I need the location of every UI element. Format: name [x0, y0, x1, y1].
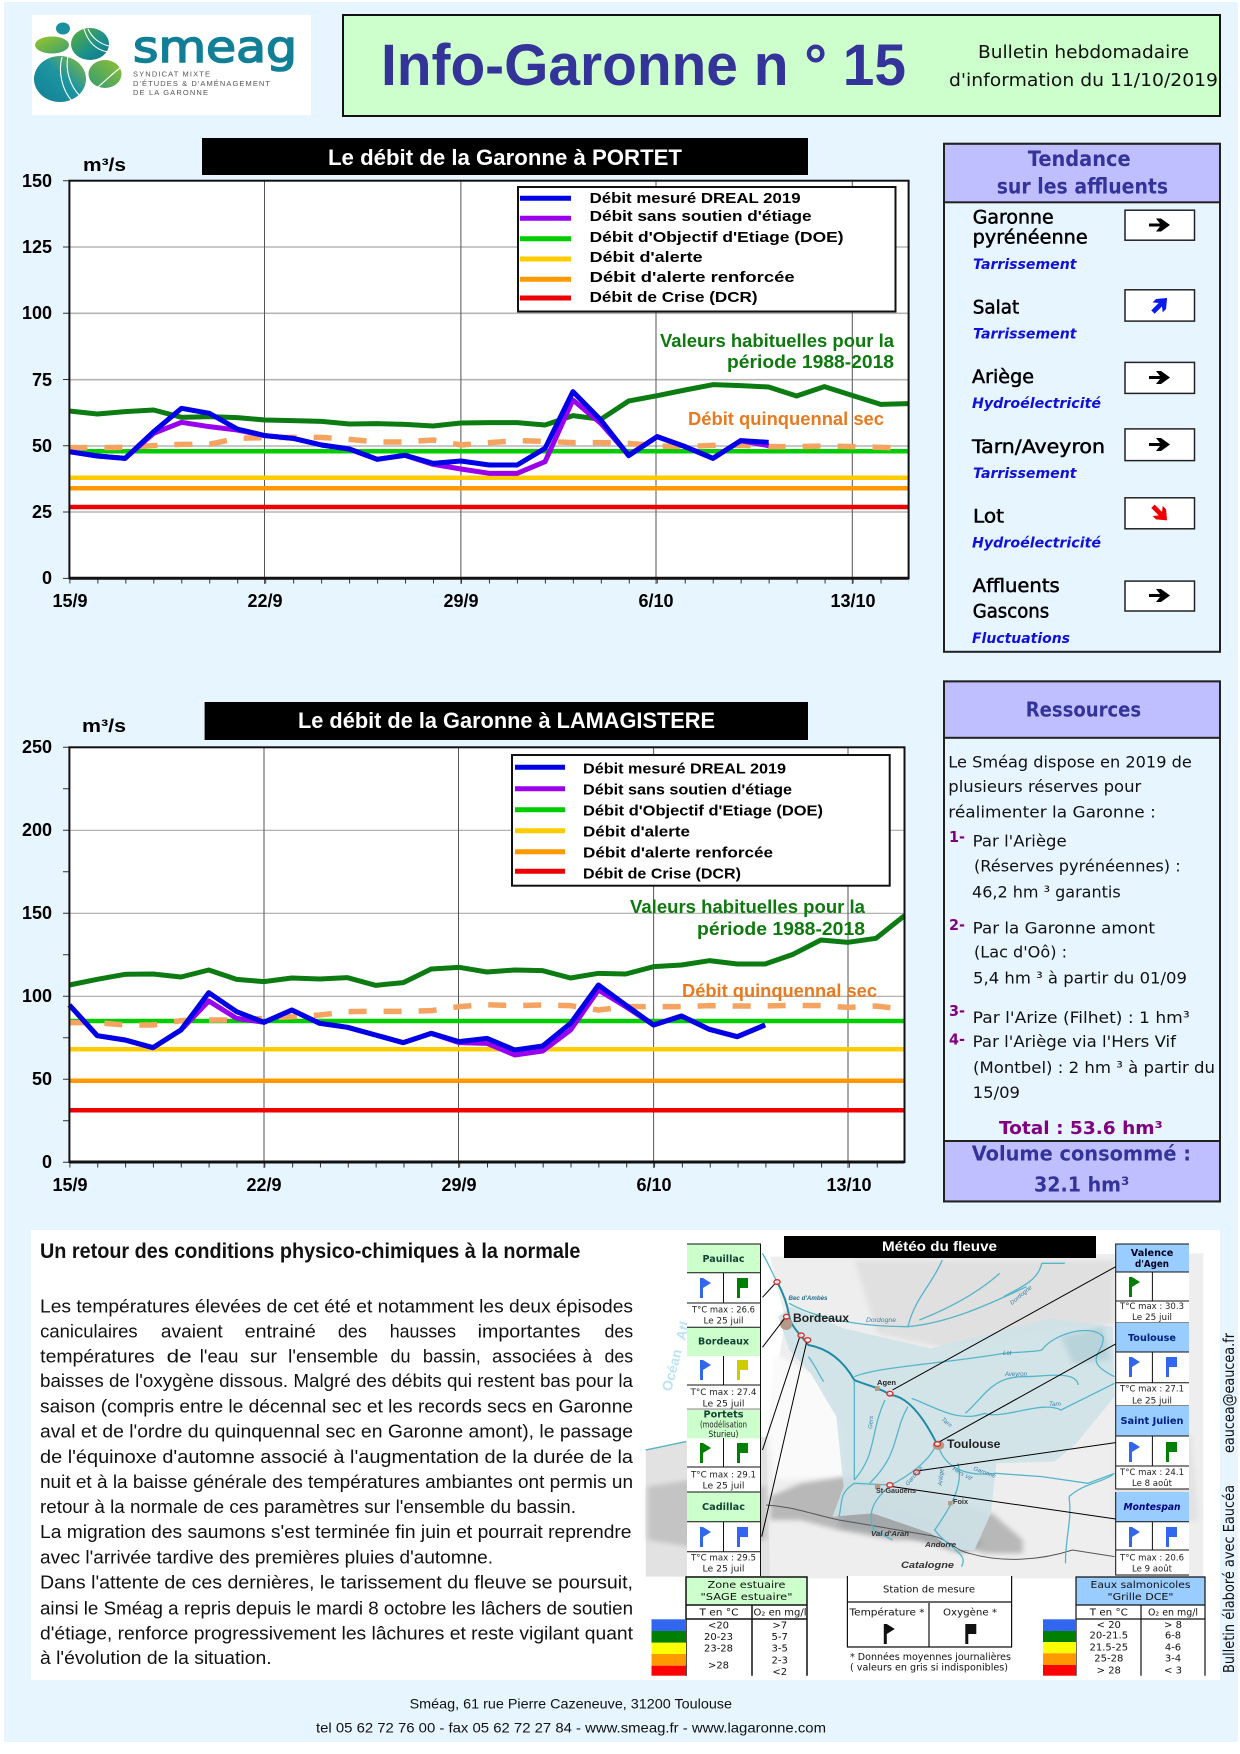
map place names: Bec d'Ambès — [788, 1295, 828, 1302]
map place names: Ariège — [938, 1468, 946, 1487]
panel header — [944, 144, 1220, 202]
legend table: eaux salmonicoles: 20-21.5 — [1089, 1631, 1128, 1642]
map: bassin de la Garonne — [646, 1236, 1203, 1578]
station: Portets: Portets — [704, 1410, 744, 1420]
x axis labels: 22/9 — [247, 591, 283, 611]
station: Montespan: Le 9 août — [1132, 1565, 1172, 1575]
x axis labels: 13/10 — [830, 591, 876, 611]
station: Saint Julien: Saint Julien — [1120, 1416, 1184, 1427]
chart title — [205, 702, 808, 740]
resource 4: Par l'Ariège via l'Hers Vif — [973, 1032, 1176, 1051]
chart title: Le débit de la Garonne à PORTET — [328, 145, 683, 170]
y axis labels: 150 — [22, 903, 52, 923]
station: Pauillac: Le 25 juil — [704, 1316, 744, 1326]
legend: Débit d'Objectif d'Etiage (DOE) — [583, 803, 823, 820]
legend table: eaux salmonicoles: Eaux salmonicoles — [1090, 1580, 1190, 1591]
article text: bassin, — [423, 1346, 481, 1366]
icon: oxygène flag — [965, 1624, 976, 1644]
x axis labels: 29/9 — [441, 1175, 477, 1195]
legend table: zone estuaire: O₂ en mg/l — [754, 1608, 806, 1619]
logo tagline: D'ÉTUDES & D'AMÉNAGEMENT — [133, 79, 270, 88]
article text: Les températures élevées de cet été et notamment les deux épisodes — [40, 1297, 633, 1317]
legend table: zone estuaire: 2-3 — [772, 1655, 788, 1666]
y axis labels: 100 — [22, 303, 52, 323]
legend table: eaux salmonicoles: 21.5-25 — [1089, 1643, 1128, 1654]
item: Salat: Salat — [973, 296, 1019, 318]
map title: Météo du fleuve — [882, 1238, 997, 1254]
article text: à l'évolution de la situation. — [40, 1648, 272, 1668]
item: Ariège: Hydroélectricité — [972, 396, 1102, 412]
item: Lot — [972, 498, 1194, 552]
y axis labels: 125 — [22, 237, 52, 257]
item: Salat: Tarrissement — [973, 326, 1078, 342]
item: Tarn/Aveyron — [971, 429, 1194, 482]
legend table: zone estuaire: >28 — [708, 1660, 729, 1671]
chart title — [202, 138, 808, 175]
article text: à — [582, 1346, 593, 1366]
plot frame — [69, 181, 909, 578]
line: débit quinquennal sec — [69, 1005, 904, 1025]
y axis labels — [22, 737, 52, 1172]
legend table: eaux salmonicoles — [1043, 1577, 1205, 1680]
resource 2: 5,4 hm ³ à partir du 01/09 — [973, 968, 1187, 987]
vertical credit: Bulletin: Bulletin élaboré avec Eaucéa — [1220, 1485, 1238, 1673]
x axis labels — [52, 591, 876, 611]
legend table: eaux salmonicoles: > 8 — [1164, 1620, 1182, 1631]
legend table: eaux salmonicoles: < 20 — [1097, 1620, 1121, 1631]
resource 1 — [949, 828, 1181, 901]
station: Pauillac: Pauillac — [702, 1254, 745, 1265]
map connector lines — [762, 1267, 1116, 1537]
station: Saint Julien — [1116, 1406, 1189, 1489]
map basin — [778, 1307, 1115, 1550]
logo tagline — [133, 70, 270, 97]
item: Tarn/Aveyron: Tarrissement — [973, 466, 1078, 482]
legend table: eaux salmonicoles: > 28 — [1097, 1665, 1121, 1676]
map place names: Garonne — [905, 1465, 925, 1487]
intro text — [948, 752, 1192, 821]
map place names: Dordogne — [1009, 1285, 1034, 1307]
plot area — [69, 181, 909, 578]
article text: du — [390, 1346, 410, 1366]
panel header: Ressources — [1026, 698, 1141, 722]
article text: de l'équinoxe d'automne associé à l'augmentation de la durée de la — [40, 1447, 634, 1467]
legend: Débit de Crise (DCR) — [590, 289, 758, 306]
item: Lot: Lot — [973, 506, 1004, 528]
legend: Débit d'alerte — [583, 824, 690, 841]
unit label: m³/s — [83, 155, 126, 175]
station: Bordeaux: Bordeaux — [698, 1336, 750, 1348]
resource 3: Par l'Arize (Filhet) : 1 hm³ — [973, 1008, 1190, 1027]
article text: caniculaires — [40, 1322, 138, 1342]
line: débit quinquennal sec — [69, 437, 909, 449]
y axis labels: 50 — [32, 436, 52, 456]
legend table: zone estuaire: 20-23 — [704, 1632, 733, 1643]
annotation: débit quinquennal sec: Débit quinquennal sec — [688, 409, 884, 429]
station: Portets: Le 25 juil — [702, 1482, 744, 1492]
map station markers — [774, 1280, 940, 1487]
legend table: eaux salmonicoles: 25-28 — [1094, 1654, 1123, 1665]
map place names: St-Gaudens — [876, 1486, 916, 1495]
station: Valence d'Agen: d'Agen — [1135, 1259, 1169, 1270]
intro text: réalimenter la Garonne : — [948, 802, 1156, 821]
annotation: valeurs habituelles — [630, 897, 866, 939]
line: débit sans soutien — [69, 990, 765, 1055]
article text: des — [604, 1346, 633, 1366]
item: Tarn/Aveyron: Tarn/Aveyron — [971, 436, 1105, 458]
legend table: station de mesure: Température * — [848, 1607, 924, 1619]
panel: ressources — [944, 681, 1220, 1201]
y axis labels: 25 — [32, 502, 52, 522]
map place names: Agen — [877, 1378, 896, 1387]
data lines — [69, 385, 909, 473]
subtitle — [949, 42, 1218, 91]
subtitle: Bulletin hebdomadaire — [978, 42, 1189, 63]
icon: température flag — [884, 1624, 895, 1644]
table footnote: ( valeurs en gris si indisponibles) — [850, 1662, 1008, 1674]
station: Portets — [687, 1409, 760, 1492]
map place names: Val d'Aran — [871, 1531, 909, 1538]
panel header — [944, 681, 1220, 738]
item: Garonne pyrénéenne — [973, 207, 1194, 273]
resource 3: 3- — [949, 1002, 965, 1020]
x axis labels — [52, 1175, 872, 1195]
station: Valence d'Agen: T°C max : 30.3 — [1119, 1302, 1184, 1312]
vertical credit: email: eaucea@eaucea.fr — [1220, 1332, 1238, 1453]
station: Montespan: T°C max : 20.6 — [1119, 1554, 1184, 1564]
legend table: zone estuaire: Zone estuaire — [708, 1580, 786, 1591]
legend table: eaux salmonicoles: 4-6 — [1165, 1643, 1181, 1654]
legend table: zone estuaire: 5-7 — [772, 1632, 788, 1643]
item: Lot: Hydroélectricité — [972, 536, 1102, 552]
station: Montespan — [1116, 1492, 1189, 1575]
legend table: zone estuaire: <20 — [708, 1621, 729, 1632]
item: Garonne pyrénéenne: pyrénéenne — [973, 227, 1088, 249]
legend: Débit de Crise (DCR) — [583, 866, 741, 883]
map place names: Garonne — [972, 1466, 997, 1480]
legend: Débit d'alerte renforcée — [590, 269, 795, 286]
y axis labels: 150 — [22, 171, 52, 191]
article text: importantes — [478, 1322, 580, 1342]
station: Toulouse: T°C max : 27.1 — [1119, 1385, 1184, 1395]
legend table: eaux salmonicoles: "Grille DCE" — [1108, 1592, 1174, 1603]
item: Affluents Gascons: Gascons — [973, 600, 1049, 622]
data lines — [69, 916, 904, 1055]
resource 2: Par la Garonne amont — [973, 918, 1155, 937]
resource 4: 15/09 — [973, 1083, 1020, 1102]
legend table: eaux salmonicoles: 6-8 — [1165, 1631, 1181, 1642]
x axis labels: 6/10 — [636, 1175, 672, 1195]
y axis labels: 0 — [42, 568, 52, 588]
legend table: eaux salmonicoles: 3-4 — [1165, 1654, 1181, 1665]
article heading: Un retour des conditions physico-chimiques à la normale — [40, 1240, 580, 1263]
panel header: Tendance — [1028, 147, 1131, 171]
station: Valence d'Agen — [1116, 1244, 1189, 1323]
legend — [518, 187, 896, 312]
article text: retour à la normale de ces paramètres sur l'ensemble du bassin. — [40, 1497, 576, 1517]
station: Pauillac: T°C max : 26.6 — [691, 1306, 755, 1316]
plot frame — [69, 747, 904, 1162]
article text: l'eau — [200, 1346, 238, 1366]
station: Bordeaux: T°C max : 27.4 — [690, 1388, 757, 1398]
map place names: Tarn — [940, 1417, 953, 1430]
item: Ariège: Ariège — [972, 366, 1034, 388]
legend table: station de mesure: Oxygène * — [943, 1607, 997, 1619]
table footnote — [850, 1651, 1011, 1674]
intro text: plusieurs réserves pour — [948, 777, 1142, 796]
map border line — [646, 1442, 1115, 1559]
item: Affluents Gascons — [972, 575, 1194, 647]
legend table: zone estuaire — [652, 1577, 807, 1680]
logo: smeag — [32, 15, 311, 115]
legend table: zone estuaire: >7 — [772, 1620, 787, 1631]
legend: Débit sans soutien d'étiage — [590, 208, 812, 225]
annotation: valeurs habituelles: Valeurs habituelles pour la — [660, 331, 895, 351]
unit label: m³/s — [82, 716, 126, 736]
map place names: Bordeaux — [793, 1311, 849, 1325]
legend: Débit d'Objectif d'Etiage (DOE) — [590, 229, 844, 246]
resource 3 — [949, 1002, 1190, 1027]
colour scale — [652, 1619, 686, 1676]
map place names: Hers Vif — [951, 1467, 974, 1483]
footer: tel 05 62 72 76 00 - fax 05 62 72 27 84 - www.smeag.fr - www.lagaronne.com — [316, 1720, 826, 1736]
volume consommé: Volume consommé : — [972, 1142, 1191, 1166]
article text: d'étiage, renforce progressivement les lâchures et reste vigilant quant — [40, 1623, 633, 1643]
station: Saint Julien: Le 8 août — [1132, 1479, 1172, 1489]
footer: Sméag, 61 rue Pierre Cazeneuve, 31200 Toulouse — [410, 1696, 732, 1712]
legend table: eaux salmonicoles: O₂ en mg/l — [1148, 1608, 1198, 1619]
article text: températures — [40, 1346, 155, 1366]
annotation: valeurs habituelles — [660, 331, 895, 372]
station: Montespan: Montespan — [1124, 1502, 1180, 1513]
resource 1: 1- — [949, 828, 965, 846]
x axis labels: 29/9 — [443, 591, 479, 611]
volume consommé — [944, 1141, 1220, 1201]
annotation: valeurs habituelles: Valeurs habituelles pour la — [630, 897, 866, 917]
legend table: zone estuaire: T en °C — [698, 1608, 739, 1619]
item: Affluents Gascons: Affluents — [973, 575, 1060, 597]
article text: nuit et à la baisse générale des températures ambiantes ont permis un — [40, 1472, 633, 1492]
station: Portets: (modélisation — [700, 1420, 747, 1430]
item: Salat — [973, 290, 1194, 342]
article text: entrainé — [245, 1322, 316, 1342]
panel: article — [31, 1230, 1220, 1680]
footer — [316, 1696, 826, 1736]
article text: avec l'arrivée tardive des premières pluies d'automne. — [40, 1547, 493, 1567]
resource 4: 4- — [949, 1031, 965, 1049]
station: Valence d'Agen: Valence — [1131, 1248, 1173, 1259]
item: Affluents Gascons: Fluctuations — [972, 631, 1070, 647]
legend table: station de mesure — [847, 1576, 1012, 1674]
legend: Débit mesuré DREAL 2019 — [583, 760, 786, 778]
map place names: Lot — [1003, 1351, 1012, 1357]
threshold lines — [69, 1021, 904, 1110]
article text: sur — [250, 1346, 277, 1366]
map place names: Océan — [658, 1347, 685, 1393]
map place names: Andorre — [924, 1540, 956, 1549]
legend table: zone estuaire: 23-28 — [704, 1644, 733, 1655]
map city blobs — [780, 1318, 953, 1505]
station: Cadillac: Cadillac — [702, 1502, 745, 1513]
table footnote: * Données moyennes journalières — [850, 1651, 1011, 1663]
item: Garonne pyrénéenne: Garonne — [973, 207, 1054, 229]
line: débit mesuré — [69, 392, 769, 465]
x axis labels: 13/10 — [826, 1175, 872, 1195]
article text: baisses de l'oxygène dissous. Malgré des débits qui restent bas pour la — [40, 1371, 634, 1391]
total: Total : 53.6 hm³ — [999, 1118, 1163, 1139]
map place names: Aveyron — [1004, 1372, 1028, 1378]
y axis labels: 0 — [42, 1152, 52, 1172]
map title — [784, 1236, 1096, 1258]
x axis labels: 22/9 — [246, 1175, 282, 1195]
legend table: zone estuaire: "SAGE estuaire" — [700, 1592, 792, 1603]
map place names: Dordogne — [866, 1318, 897, 1324]
article text: ainsi le Sméag a repris depuis le mardi 8 octobre les lâchers de soutien — [40, 1598, 633, 1618]
map place names: Atl — [672, 1320, 693, 1342]
map place names: Gers — [868, 1416, 875, 1429]
station: Bordeaux — [687, 1327, 760, 1410]
article text: des — [604, 1322, 633, 1342]
map Garonne main stem — [777, 1282, 937, 1443]
line: débit mesuré — [69, 985, 765, 1050]
resource 4: (Montbel) : 2 hm ³ à partir du — [973, 1058, 1215, 1077]
subtitle: d'information du 11/10/2019 — [949, 70, 1218, 91]
annotation: valeurs habituelles: période 1988-2018 — [697, 919, 865, 939]
y axis labels — [22, 171, 52, 588]
article text: des — [338, 1322, 367, 1342]
legend: Débit d'alerte renforcée — [583, 845, 773, 862]
logo tagline: DE LA GARONNE — [133, 88, 208, 97]
article text: Dans l'attente de ces dernières, le tarissement du fleuve se poursuit, — [40, 1572, 633, 1592]
article text: avaient — [161, 1322, 223, 1342]
icon: logo pebbles — [34, 22, 122, 102]
map place names: Foix — [953, 1497, 969, 1506]
resource 2: (Lac d'Oô) : — [974, 942, 1067, 962]
article text: saison (compris entre le décennal sec et les records secs en Garonne — [40, 1396, 633, 1416]
y axis labels: 250 — [22, 737, 52, 757]
station: Toulouse — [1116, 1323, 1189, 1406]
map relief — [646, 1253, 1203, 1578]
y axis labels: 200 — [22, 820, 52, 840]
resource 1: Par l'Ariège — [973, 831, 1067, 850]
panel header: sur les affluents — [997, 175, 1168, 199]
annotation: valeurs habituelles: période 1988-2018 — [727, 352, 894, 372]
article text: hausses — [390, 1322, 456, 1342]
station: Cadillac — [687, 1492, 760, 1576]
y axis labels: 50 — [32, 1069, 52, 1089]
legend: Débit d'alerte — [590, 249, 703, 266]
map place names — [658, 1285, 1061, 1570]
volume consommé: 32.1 hm³ — [1034, 1173, 1129, 1197]
legend table: eaux salmonicoles: < 3 — [1164, 1665, 1182, 1676]
threshold lines — [69, 451, 909, 507]
article text: l'ensemble — [288, 1346, 378, 1366]
station: Portets: Sturieu) — [708, 1430, 738, 1440]
x axis labels: 15/9 — [52, 1175, 88, 1195]
station: Toulouse: Toulouse — [1128, 1333, 1176, 1344]
article text: associées — [492, 1346, 576, 1366]
station: Saint Julien: T°C max : 24.1 — [1119, 1468, 1184, 1478]
y axis labels: 100 — [22, 986, 52, 1006]
title: Info-Garonne n ° 15 — [381, 33, 906, 98]
x axis labels: 6/10 — [638, 591, 674, 611]
article text: de — [167, 1346, 192, 1366]
station: Cadillac: T°C max : 29.5 — [690, 1554, 756, 1564]
resource 2: 2- — [949, 916, 965, 934]
resource 1: 46,2 hm ³ garantis — [972, 882, 1121, 901]
legend table: station de mesure: Station de mesure — [883, 1584, 975, 1596]
article text — [40, 1297, 634, 1668]
station: Valence d'Agen: Le 25 juil — [1132, 1313, 1172, 1323]
legend — [512, 755, 890, 886]
annotation: débit quinquennal sec: Débit quinquennal sec — [682, 981, 877, 1001]
station: Portets: T°C max : 29.1 — [690, 1471, 756, 1481]
station: Pauillac — [687, 1244, 760, 1327]
legend: Débit sans soutien d'étiage — [583, 782, 792, 799]
panel: tendance sur les affluents — [944, 144, 1220, 652]
x axis labels: 15/9 — [52, 591, 88, 611]
station: Toulouse: Le 25 juil — [1132, 1396, 1172, 1406]
chart title: Le débit de la Garonne à LAMAGISTERE — [298, 708, 715, 733]
title panel — [343, 15, 1220, 116]
logo wordmark: smeag — [133, 22, 297, 73]
article text: aval et de l'ordre du quinquennal sec en Garonne amont), le passage — [40, 1421, 633, 1441]
station: Cadillac: Le 25 juil — [702, 1565, 744, 1575]
map place names: Toulouse — [947, 1437, 1001, 1451]
resource 2 — [949, 916, 1187, 987]
line: débit sans soutien — [69, 400, 769, 473]
item: Ariège — [972, 362, 1194, 412]
map place names: Tarn — [1049, 1402, 1061, 1408]
legend: Débit mesuré DREAL 2019 — [590, 190, 801, 207]
map place names: Catalogne — [901, 1560, 954, 1570]
chart: débit à Lamagistère — [22, 702, 904, 1195]
colour scale — [1043, 1619, 1076, 1676]
line: valeurs habituelles — [69, 385, 909, 426]
resource 1: (Réserves pyrénéennes) : — [974, 856, 1181, 875]
logo tagline: SYNDICAT MIXTE — [133, 70, 210, 79]
y axis labels: 75 — [32, 370, 52, 390]
resource 4 — [949, 1031, 1215, 1102]
line: valeurs habituelles — [69, 916, 904, 985]
legend table: zone estuaire: <2 — [772, 1667, 787, 1678]
legend table: zone estuaire: 3-5 — [772, 1644, 788, 1655]
intro text: Le Sméag dispose en 2019 de — [948, 752, 1192, 772]
legend table: eaux salmonicoles: T en °C — [1089, 1608, 1128, 1619]
map rivers — [646, 1253, 1115, 1567]
article text: La migration des saumons s'est terminée fin juin et pourrait reprendre — [40, 1522, 632, 1542]
plot area — [69, 747, 904, 1162]
item: Garonne pyrénéenne: Tarrissement — [973, 257, 1078, 273]
station: Bordeaux: Le 25 juil — [702, 1400, 744, 1410]
chart: débit à Portet — [22, 138, 909, 611]
